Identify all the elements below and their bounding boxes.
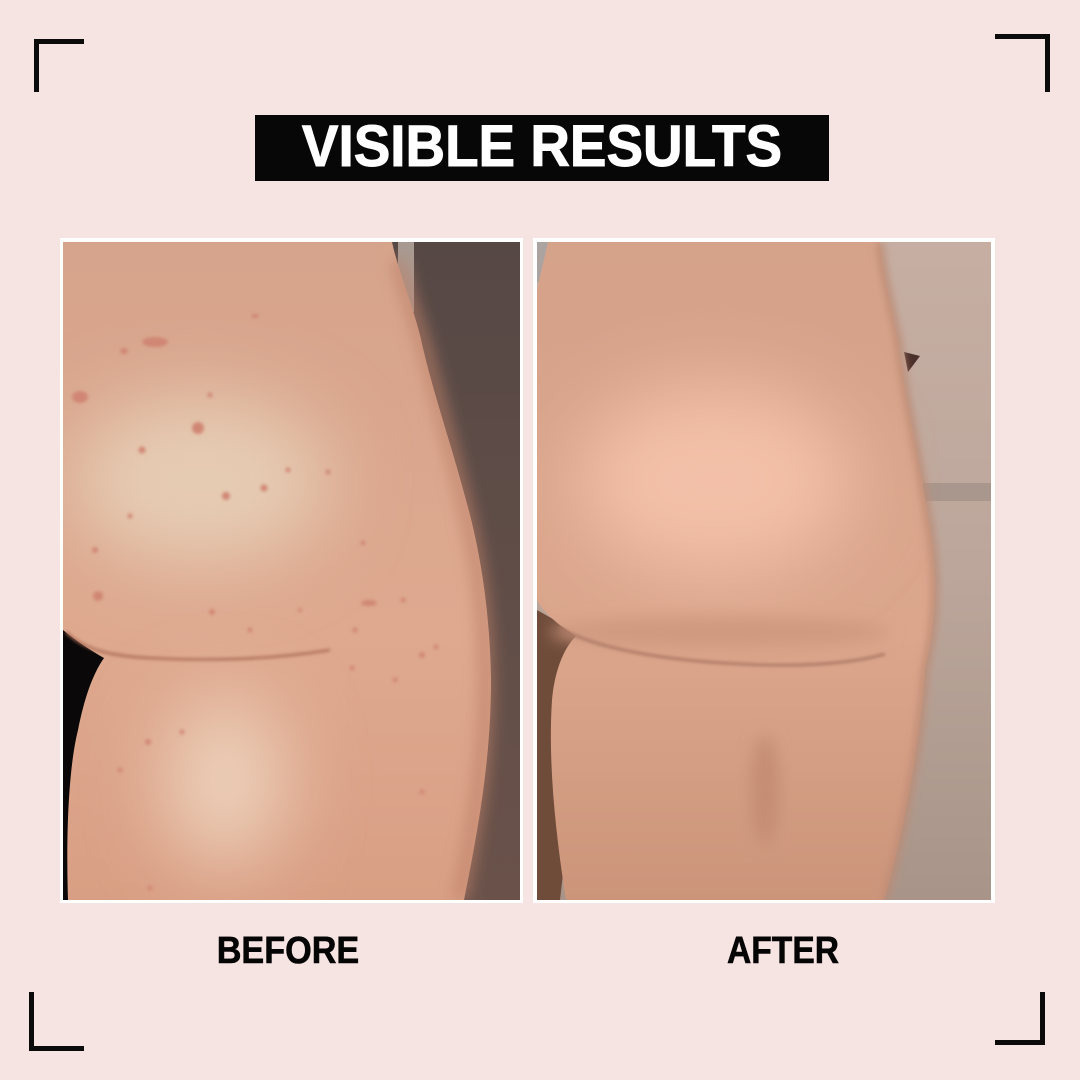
frame: after photo — [533, 238, 995, 903]
photo: before — [63, 242, 520, 900]
frame: before photo — [60, 238, 523, 903]
skin spots: before — [72, 314, 438, 890]
title text: VISIBLE RESULTS — [302, 114, 782, 179]
photo: after — [537, 242, 991, 900]
panel: before and after photos — [60, 238, 995, 903]
title banner — [255, 115, 829, 181]
label: after: AFTER — [727, 930, 839, 972]
label: before: BEFORE — [217, 930, 359, 972]
